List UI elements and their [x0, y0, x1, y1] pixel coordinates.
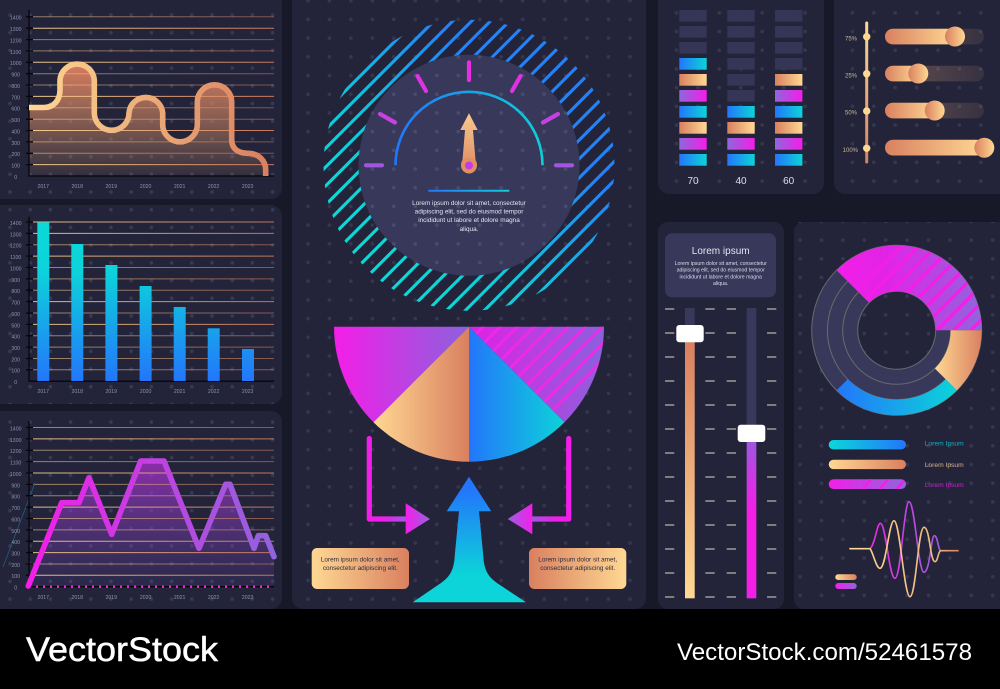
- panel: wave line chart: [0, 0, 282, 199]
- axes: zigzag chart: [26, 421, 274, 587]
- y axis labels: wave chart: 1100: [10, 50, 21, 56]
- mixer heading box: adipiscing elit, sed do eiusmod tempor: [677, 268, 765, 274]
- percent labels: 100%: [843, 148, 859, 154]
- fader left: [676, 308, 704, 598]
- y axis labels: zigzag chart: 1300: [10, 438, 22, 444]
- faint diagonal line: [3, 483, 35, 567]
- fader ticks: [665, 309, 776, 597]
- y axis labels: wave chart: 1400: [10, 16, 22, 22]
- wave: purple: [870, 502, 941, 578]
- small legend pills: [835, 574, 857, 589]
- x axis labels: wave chart: 2019: [106, 184, 117, 190]
- x axis labels: bar chart: 2022: [208, 389, 219, 395]
- arrow: right elbow: [508, 438, 569, 534]
- area fill: wave chart: [29, 64, 266, 176]
- gauge text: Lorem ipsum dolor sit amet, consectetur: [412, 200, 527, 207]
- y axis labels: bar chart: 300: [11, 346, 20, 352]
- gauge arc: [396, 92, 542, 165]
- arrow: left elbow: [369, 438, 430, 534]
- mixer heading box: aliqua.: [713, 281, 728, 287]
- callout: left: Lorem ipsum dolor sit amet,: [321, 556, 400, 564]
- y axis labels: bar chart: 500: [11, 323, 20, 329]
- percent labels: 75%: [845, 36, 858, 42]
- x axis labels: zigzag chart: 2022: [208, 595, 219, 601]
- y axis labels: wave chart: 600: [11, 107, 20, 113]
- gauge needle: [460, 113, 478, 174]
- percent labels: 25%: [845, 74, 858, 80]
- block column 60: [775, 10, 802, 166]
- y axis labels: bar chart: 0: [14, 380, 17, 386]
- y axis labels: zigzag chart: 1400: [10, 426, 22, 432]
- x axis labels: zigzag chart: 2018: [72, 595, 83, 601]
- y axis labels: zigzag chart: 600: [11, 517, 20, 523]
- wave line: [29, 64, 266, 176]
- arrow: central up: [413, 477, 526, 602]
- y axis labels: zigzag chart: 0: [14, 586, 17, 592]
- x axis labels: wave chart: 2021: [174, 184, 185, 190]
- footer band: [0, 609, 1000, 689]
- y axis labels: zigzag chart: [10, 426, 22, 592]
- y axis labels: wave chart: 200: [11, 152, 20, 158]
- x axis labels: bar chart: 2023: [242, 389, 253, 395]
- y axis labels: wave chart: [10, 16, 22, 181]
- footer brand: VectorStock: [26, 631, 219, 669]
- callout: right: consectetur adipiscing elit.: [540, 565, 615, 572]
- x axis labels: bar chart: 2020: [140, 389, 151, 395]
- y axis labels: zigzag chart: 1200: [10, 449, 22, 455]
- y axis labels: bar chart: 1200: [10, 244, 22, 250]
- mixer heading box: Lorem ipsum dolor sit amet, consectetur: [675, 261, 767, 267]
- y axis labels: zigzag chart: 500: [11, 529, 20, 535]
- y axis labels: bar chart: [10, 221, 22, 386]
- y axis labels: bar chart: 800: [11, 289, 20, 295]
- x axis labels: zigzag chart: 2019: [106, 595, 117, 601]
- y axis labels: zigzag chart: 1100: [10, 460, 21, 466]
- x axis labels: wave chart: 2023: [242, 184, 253, 190]
- donut segment: magenta: [836, 245, 982, 330]
- y axis labels: wave chart: 1000: [10, 61, 22, 67]
- y axis labels: bar chart: 900: [11, 278, 20, 284]
- semicircle pie: [334, 326, 604, 462]
- bars: [37, 222, 254, 381]
- y axis labels: zigzag chart: 700: [11, 506, 20, 512]
- dashed baseline: [36, 585, 274, 588]
- gauge text: [412, 200, 527, 233]
- donut segment: peach: [935, 330, 982, 390]
- zigzag line: [28, 461, 274, 586]
- y axis labels: bar chart: 1100: [10, 255, 21, 261]
- donut chart: [811, 244, 982, 416]
- slider 50: [885, 100, 984, 120]
- gauge disc: [358, 55, 580, 276]
- gauge ticks: [366, 62, 572, 165]
- x axis labels: zigzag chart: 2021: [174, 595, 185, 601]
- gauge text: adipiscing elit, sed do eiusmod tempor: [415, 209, 524, 216]
- fader right: [738, 308, 765, 598]
- callout: left: [312, 548, 409, 589]
- x axis labels: zigzag chart: [38, 595, 253, 601]
- y axis labels: wave chart: 900: [11, 72, 20, 78]
- y axis labels: wave chart: 300: [11, 141, 20, 147]
- mixer heading box: Lorem ipsum: [692, 246, 750, 257]
- y axis labels: wave chart: 1200: [10, 38, 22, 44]
- block column 70: [679, 10, 707, 166]
- slider 100: [885, 138, 994, 158]
- panel: donut and legend: [794, 222, 1000, 609]
- x axis labels: wave chart: 2020: [140, 184, 151, 190]
- x axis labels: bar chart: 2021: [174, 389, 185, 395]
- y axis labels: bar chart: 200: [11, 357, 20, 363]
- y axis labels: zigzag chart: 900: [11, 483, 20, 489]
- y axis labels: wave chart: 0: [14, 175, 17, 181]
- callout: right: [529, 548, 626, 589]
- x axis labels: bar chart: 2019: [106, 389, 117, 395]
- striped ring: [324, 20, 614, 311]
- legend row: peach: Lorem Ipsum: [925, 462, 964, 469]
- x axis labels: bar chart: [38, 389, 253, 395]
- slider 75: [885, 26, 984, 46]
- panel: zigzag line chart: [0, 411, 282, 609]
- y axis labels: bar chart: 1300: [10, 232, 22, 238]
- legend row: peach: [829, 460, 964, 469]
- x axis labels: zigzag chart: 2017: [38, 595, 49, 601]
- y axis labels: zigzag chart: 200: [11, 563, 20, 569]
- y axis labels: bar chart: 400: [11, 335, 20, 341]
- area fill: zigzag chart: [28, 461, 274, 587]
- footer image id: VectorStock.com/52461578: [677, 639, 972, 666]
- callout: left: consectetur adipiscing elit.: [323, 565, 398, 572]
- panel: centre gauge and pie: [292, 0, 646, 609]
- axes: wave chart: [26, 10, 274, 176]
- y axis labels: bar chart: 600: [11, 312, 20, 318]
- x axis labels: zigzag chart: 2020: [140, 595, 151, 601]
- block values: 40: [735, 176, 747, 187]
- panel: mixer faders: [658, 222, 784, 609]
- y axis labels: wave chart: 700: [11, 95, 20, 101]
- gauge underline: [428, 190, 509, 192]
- gauge text: incididunt ut labore et dolore magna: [418, 217, 520, 224]
- mixer heading box: incididunt ut labore et dolore magna: [679, 274, 762, 280]
- vertical scale: [863, 23, 870, 162]
- y axis labels: wave chart: 400: [11, 129, 20, 135]
- x axis labels: wave chart: 2022: [208, 184, 219, 190]
- y axis labels: zigzag chart: 800: [11, 495, 20, 501]
- y axis labels: bar chart: 100: [11, 369, 20, 375]
- callout: right: Lorem ipsum dolor sit amet,: [538, 556, 617, 564]
- y axis labels: bar chart: 1000: [10, 266, 22, 272]
- x axis labels: wave chart: [38, 184, 253, 190]
- x axis labels: zigzag chart: 2023: [242, 595, 253, 601]
- legend row: magenta: [828, 479, 964, 489]
- x axis labels: wave chart: 2017: [38, 184, 49, 190]
- panel: stacked blocks: [658, 0, 824, 194]
- legend row: teal: Lorem Ipsum: [925, 441, 964, 448]
- mixer heading box: [665, 233, 776, 297]
- x axis labels: bar chart: 2018: [72, 389, 83, 395]
- y axis labels: wave chart: 500: [11, 118, 20, 124]
- panel: horizontal sliders: [834, 0, 1000, 194]
- y axis labels: wave chart: 800: [11, 84, 20, 90]
- panel: bar chart: [0, 205, 282, 404]
- y axis labels: zigzag chart: 400: [11, 540, 20, 546]
- legend row: teal: [829, 440, 964, 449]
- y axis labels: zigzag chart: 100: [11, 574, 20, 580]
- block values: [687, 176, 795, 187]
- y axis labels: bar chart: 1400: [10, 221, 22, 227]
- percent labels: [843, 36, 859, 154]
- percent labels: 50%: [845, 110, 858, 116]
- block values: 60: [783, 176, 795, 187]
- x axis labels: wave chart: 2018: [72, 184, 83, 190]
- y axis labels: wave chart: 100: [11, 164, 20, 170]
- gauge text: aliqua.: [460, 226, 479, 233]
- y axis labels: wave chart: 1300: [10, 27, 22, 33]
- y axis labels: bar chart: 700: [11, 300, 20, 306]
- wave: peach: [849, 521, 959, 597]
- block values: 70: [687, 176, 699, 187]
- legend row: magenta: Lorem Ipsum: [925, 482, 964, 489]
- donut segment: blue: [837, 379, 957, 415]
- slider 25: [885, 64, 984, 84]
- block column 40: [727, 10, 755, 166]
- x axis labels: bar chart: 2017: [38, 389, 49, 395]
- y axis labels: zigzag chart: 1000: [10, 472, 22, 478]
- y axis labels: zigzag chart: 300: [11, 552, 20, 558]
- axes: bar chart: [26, 217, 274, 381]
